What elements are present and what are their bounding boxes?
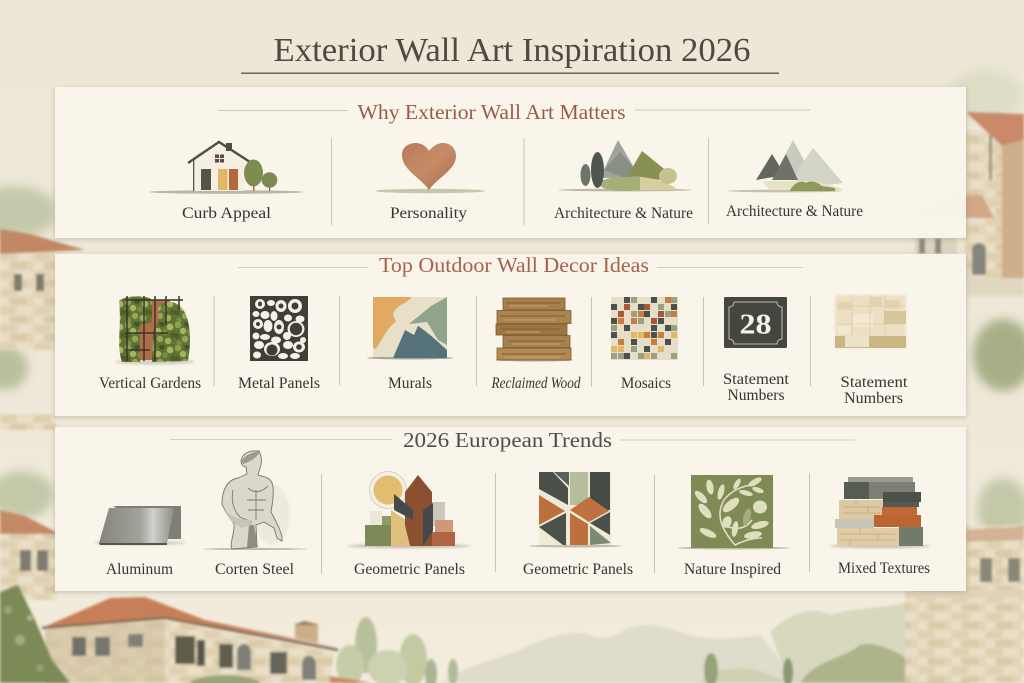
label: Architecture and Nature: Architecture & Nature [554, 205, 693, 222]
label: Statement Numbers second: Statement [840, 374, 908, 391]
label: Corten Steel: Corten Steel [215, 561, 294, 578]
label: Statement Numbers second [840, 374, 908, 407]
icon: house with trees [149, 142, 303, 194]
title: Exterior Wall Art Inspiration 2026 [274, 32, 750, 69]
label: Reclaimed Wood: Reclaimed Wood [491, 375, 581, 392]
panel: Why Exterior Wall Art Matters [54, 87, 967, 240]
heading: Why Exterior Wall Art Matters: Why Exterior Wall Art Matters [358, 100, 626, 124]
label: Nature Inspired: Nature Inspired [684, 561, 781, 578]
building: lower left house [0, 510, 60, 600]
building: lower right stone wall [905, 525, 1024, 683]
panel: 2026 European Trends [54, 427, 967, 593]
icon: classical torso statue [203, 451, 307, 550]
icon: botanical leaf panel [677, 475, 789, 550]
icon: laser cut metal panel [250, 296, 308, 361]
label: Geometric Panels second: Geometric Panels [523, 561, 633, 578]
label: Aluminum: Aluminum [106, 561, 173, 578]
icon: mountains with cypress trees [558, 140, 692, 191]
building: bottom terracotta-roof villa [42, 597, 372, 683]
label: Architecture and Nature second: Architecture & Nature [726, 203, 863, 220]
icon: house number plaque 28: 28 [740, 308, 772, 340]
panel: Top Outdoor Wall Decor Ideas [54, 253, 967, 418]
icon: vertical garden trellis [115, 296, 195, 364]
building: upper right villa [905, 112, 1024, 296]
icon: geometric panels cityscape [347, 472, 471, 548]
heading: 2026 European Trends: 2026 European Trends [403, 428, 612, 452]
label: Statement Numbers [723, 371, 790, 404]
icon: mosaic tiles [611, 297, 678, 360]
foreground tree at lower left [0, 585, 70, 683]
icon: abstract mural [367, 297, 453, 360]
heading: Top Outdoor Wall Decor Ideas: Top Outdoor Wall Decor Ideas [379, 253, 649, 277]
label: Statement Numbers: Statement [723, 371, 790, 388]
icon: aluminum sheet [94, 506, 186, 545]
label: Statement Numbers second: Numbers [844, 390, 903, 407]
icon: mixed texture stone stack [830, 477, 930, 548]
icon: heart [375, 143, 485, 193]
label: Vertical Gardens: Vertical Gardens [99, 375, 201, 392]
label: Mixed Textures: Mixed Textures [838, 560, 930, 577]
label: Murals: Murals [388, 375, 432, 392]
icon: house number plaque 28 [724, 297, 787, 348]
label: Geometric Panels: Geometric Panels [354, 561, 465, 578]
label: Personality: Personality [390, 205, 467, 222]
label: Statement Numbers: Numbers [728, 387, 784, 404]
icon: reclaimed wood planks [495, 298, 573, 362]
icon: limestone tiles [835, 295, 906, 348]
label: Curb Appeal: Curb Appeal [182, 205, 271, 222]
building: middle left tower [0, 229, 85, 430]
label: Mosaics: Mosaics [621, 375, 671, 392]
icon: pale mountains [728, 140, 845, 192]
label: Metal Panels: Metal Panels [238, 375, 320, 392]
icon: geometric tile panel [529, 472, 621, 548]
